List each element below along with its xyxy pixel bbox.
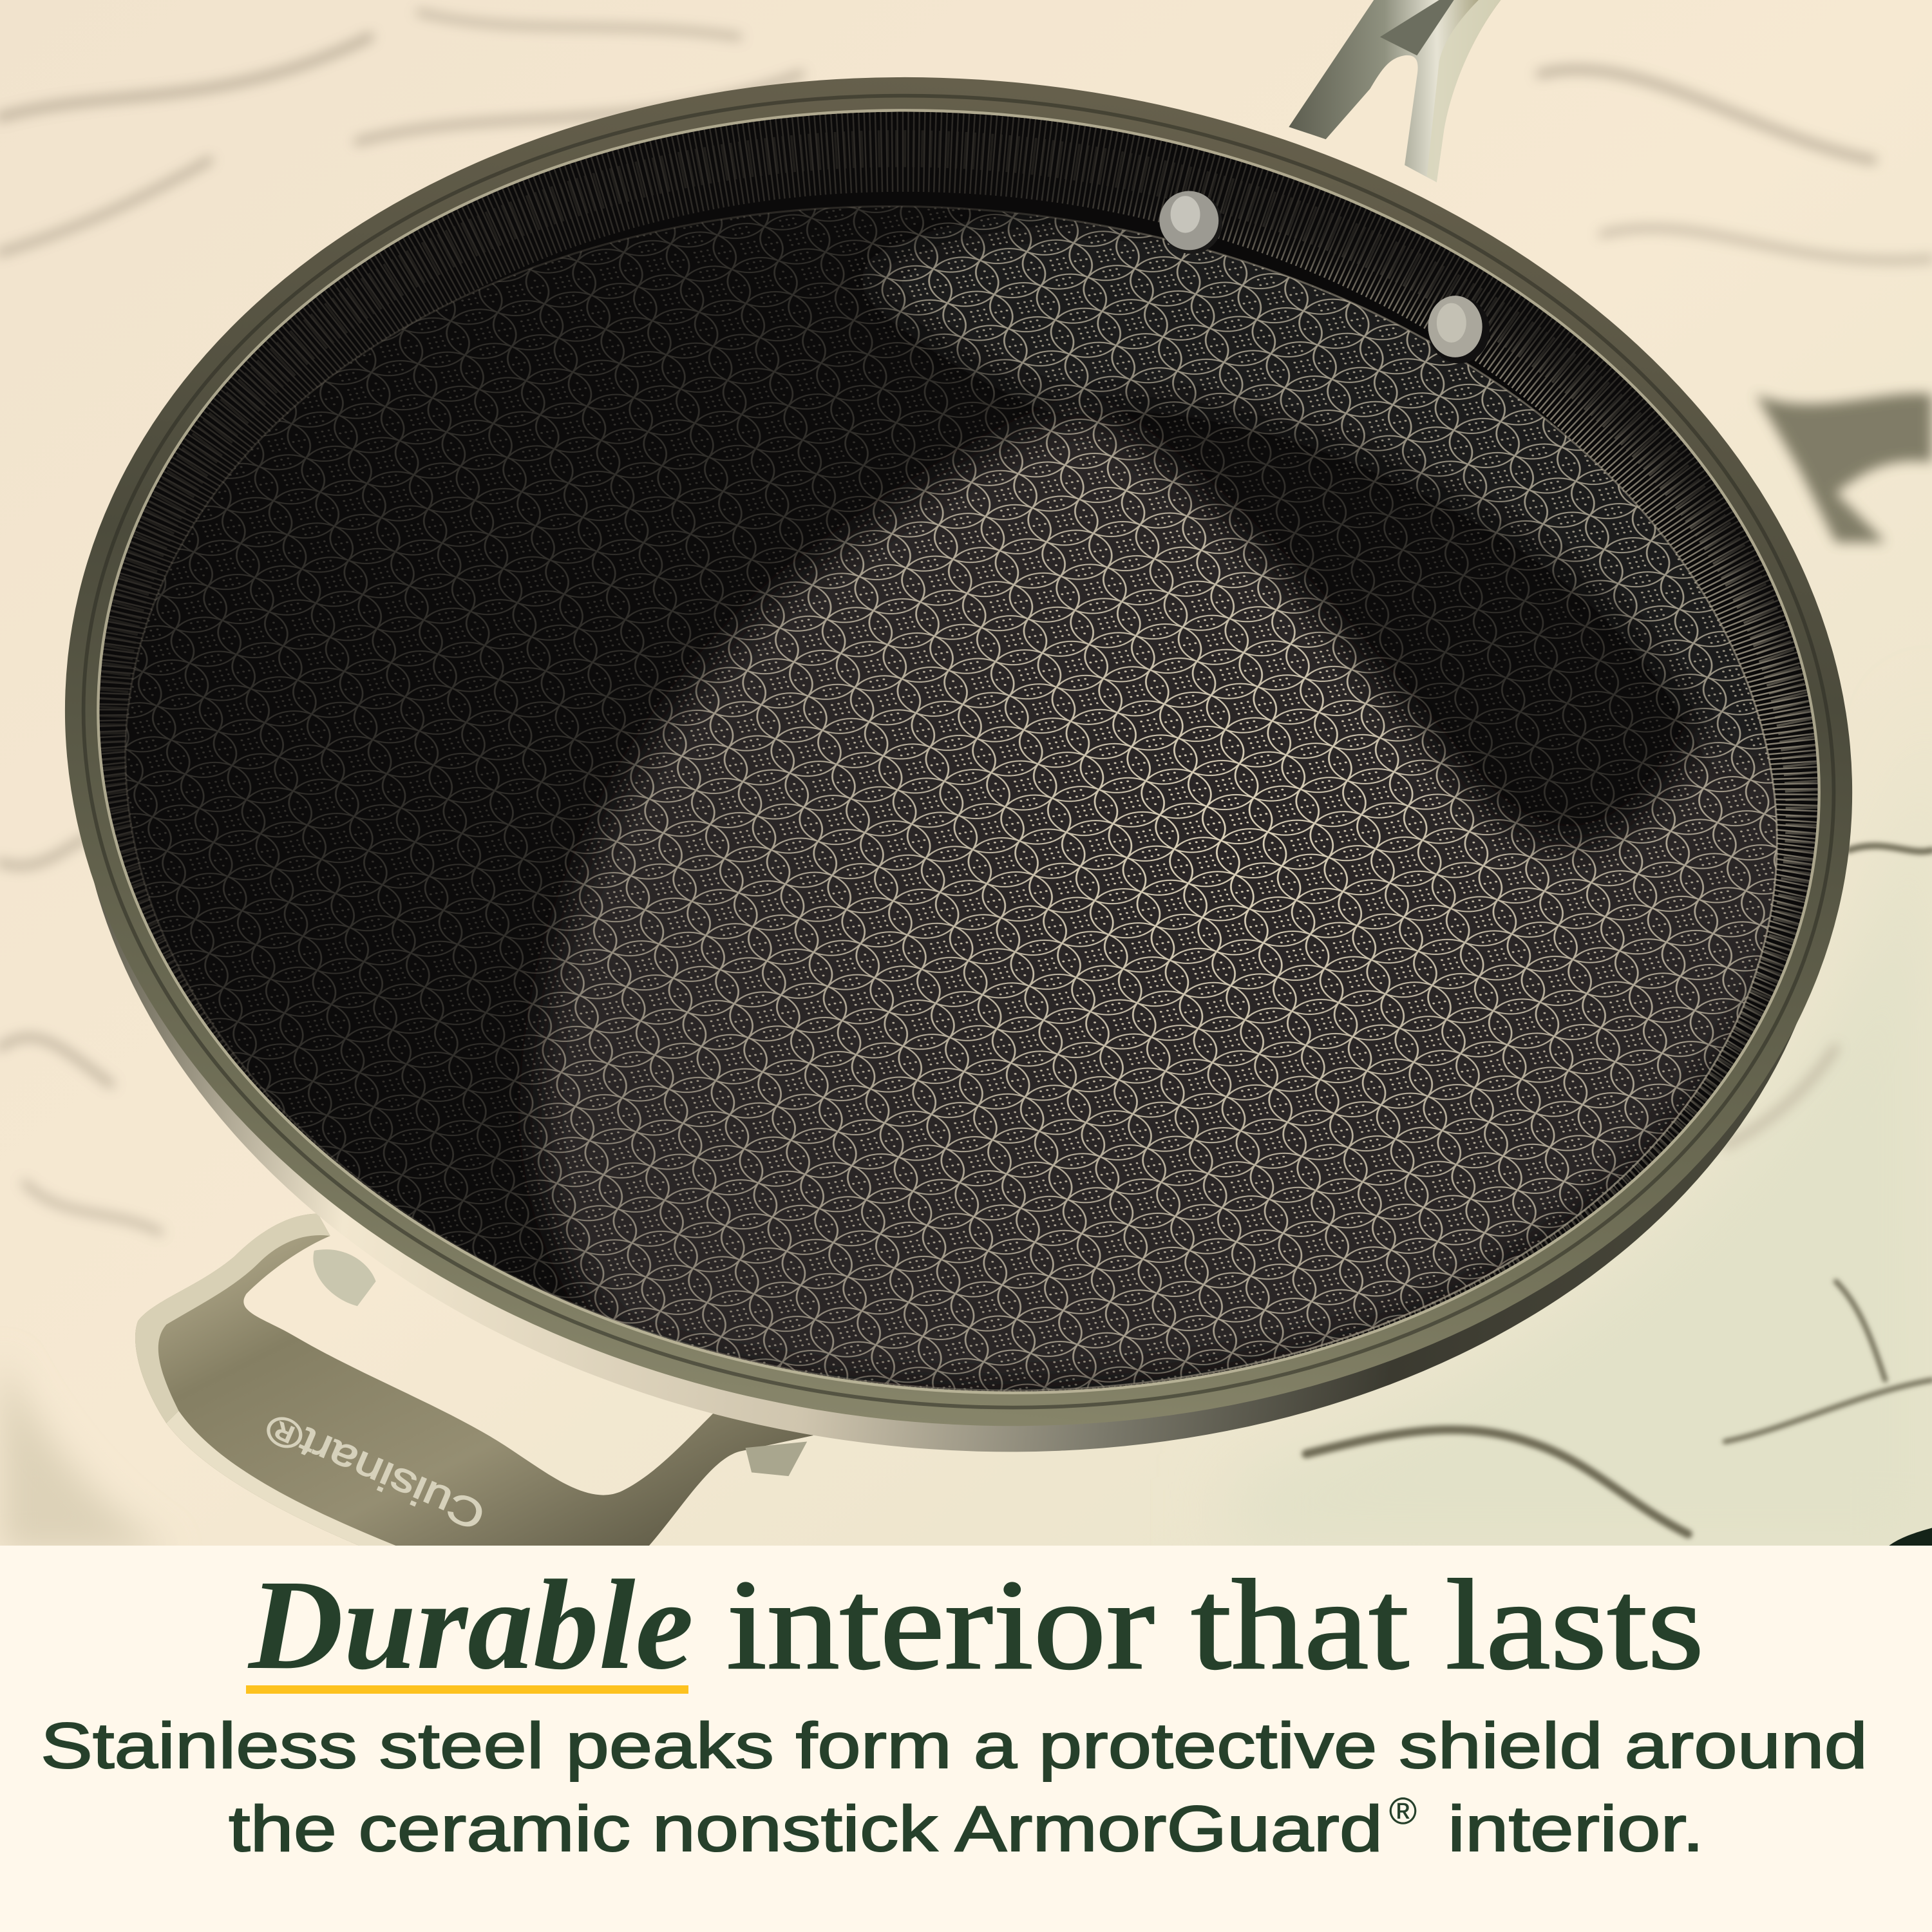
caption panel <box>0 1546 1932 1932</box>
side helper handle with logo <box>135 1214 813 1555</box>
heading underline <box>246 1685 688 1694</box>
body text: interior. <box>1448 1793 1704 1865</box>
heading: Durable <box>247 1554 694 1696</box>
body text: the ceramic nonstick ArmorGuard <box>229 1793 1383 1865</box>
rivet: lower <box>1428 296 1490 363</box>
long handle at top <box>1289 0 1501 182</box>
body text <box>41 1710 1868 1865</box>
heading: interior that lasts <box>726 1554 1704 1696</box>
pan outer wall <box>94 881 1797 1452</box>
handle logo text: Cuisinart® <box>259 1404 491 1539</box>
body text: ® <box>1389 1790 1417 1832</box>
floor of pan <box>66 126 1836 1471</box>
interior wall texture <box>35 28 1882 1481</box>
rivet: upper <box>1159 191 1222 254</box>
body text: Stainless steel peaks form a protective shield around <box>41 1710 1868 1782</box>
heading <box>247 1554 1704 1696</box>
pan rim <box>0 0 1920 1513</box>
